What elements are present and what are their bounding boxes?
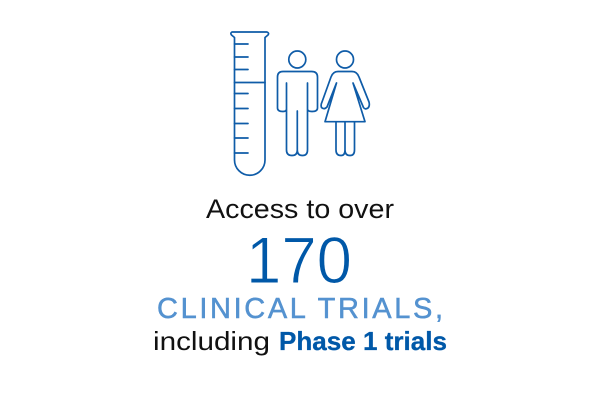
icon: man: [278, 51, 318, 156]
heading: clinical trials: CLINICAL TRIALS,: [157, 293, 443, 325]
text: including Phase 1 trials: Phase 1 trials: [279, 326, 447, 356]
icon: woman: [321, 51, 369, 156]
number: 170: 170: [246, 223, 352, 297]
text: including Phase 1 trials: including: [153, 326, 270, 356]
text: Access to over: Access to over: [206, 194, 394, 224]
text: including Phase 1 trials: [153, 326, 447, 356]
icon: test tube: [231, 32, 269, 175]
